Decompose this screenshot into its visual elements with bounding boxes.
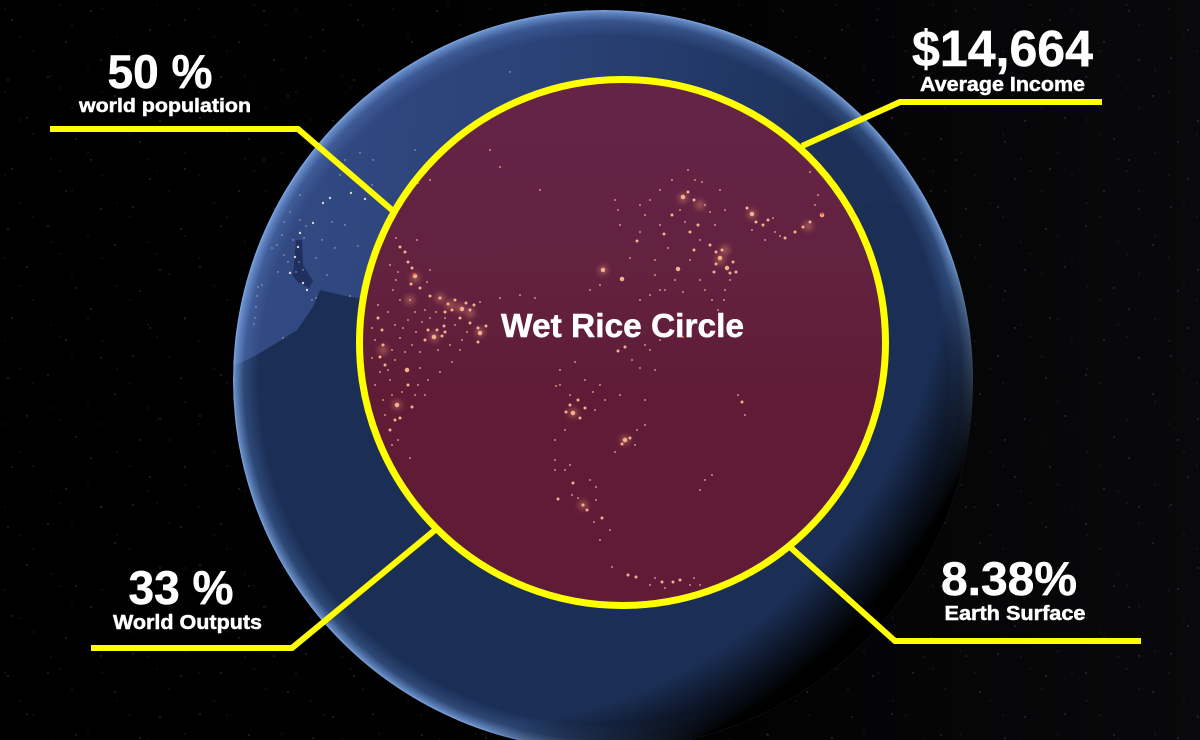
stat: 33 % world outputs: [113, 561, 262, 634]
stat: 50 % world population: 50 %: [108, 45, 212, 98]
callout line: world outputs: [91, 530, 435, 648]
stat: 33 % world outputs: World Outputs: [113, 612, 262, 634]
land mass: Asia and Africa: [233, 10, 934, 366]
terminator shading: [485, 256, 973, 740]
stat: 8.38% earth surface: [941, 552, 1086, 625]
stat: 50 % world population: [78, 45, 251, 117]
callout line: earth surface: [790, 547, 1141, 641]
globe: [200, 0, 1000, 740]
stat: 8.38% earth surface: 8.38%: [941, 552, 1077, 605]
callout line: world population: [50, 129, 392, 210]
stat: 50 % world population: world population: [78, 96, 251, 117]
stat: $14,664 average income: $14,664: [912, 20, 1094, 77]
stat: 8.38% earth surface: Earth Surface: [944, 603, 1086, 625]
wet rice circle: [360, 80, 886, 606]
soft glow over dense city regions: [383, 198, 808, 505]
city lights west of the circle: [254, 72, 510, 338]
persian gulf: [293, 240, 313, 288]
stat: 33 % world outputs: 33 %: [128, 561, 234, 614]
atmosphere rim: [233, 10, 973, 740]
callout line: average income: [802, 102, 1102, 146]
night lights inside circle: [372, 150, 822, 588]
center label: Wet Rice Circle: [501, 307, 744, 344]
stat: $14,664 average income: Average Income: [920, 74, 1085, 96]
delhi, hong kong and tokyo hot spots: [414, 214, 822, 337]
